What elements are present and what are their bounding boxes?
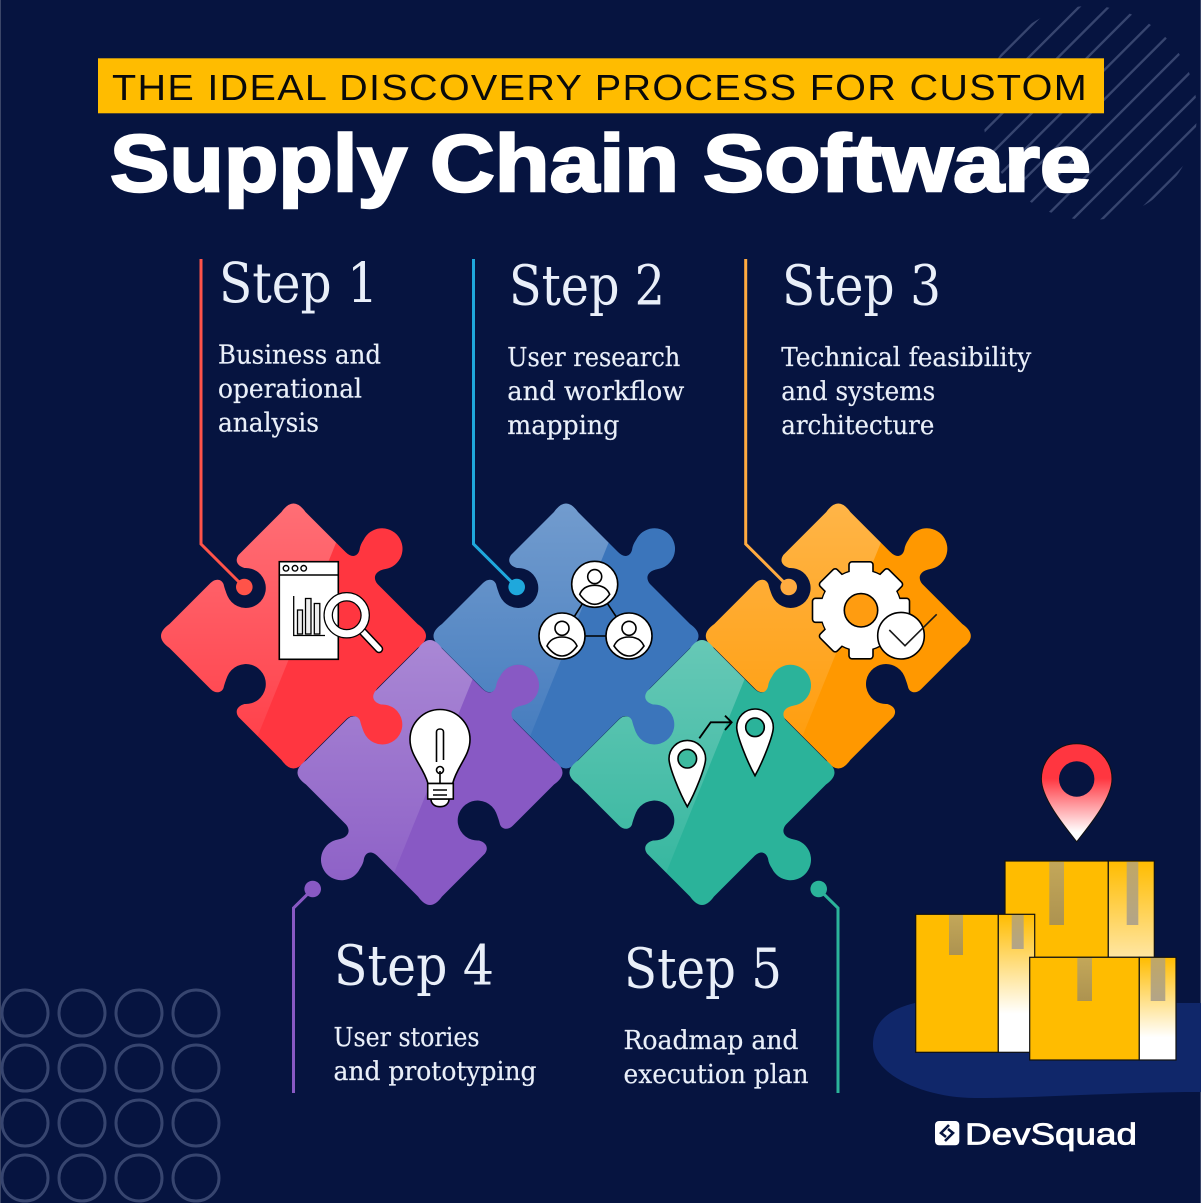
box: left (916, 914, 1035, 1052)
step 3 text: architecture (781, 411, 934, 441)
step 3 text: Technical feasibility (781, 343, 1032, 373)
step 1 connector (201, 259, 253, 595)
step 1 text: operational (218, 375, 362, 405)
location pin (1041, 744, 1112, 842)
step 5 text: Roadmap and (624, 1026, 798, 1056)
main heading: Chain (430, 119, 679, 209)
step 1 text: Business and (218, 340, 381, 370)
puzzle piece: orange (706, 504, 971, 768)
step 4 connector (294, 881, 321, 1093)
step 5 text: execution plan (624, 1060, 809, 1090)
step 2 text: mapping (507, 411, 619, 441)
title banner: THE IDEAL DISCOVERY PROCESS FOR CUSTOM (112, 67, 1088, 108)
box: back (1005, 861, 1154, 957)
step 2 text: User research (507, 343, 681, 373)
step 3 text: Step 3 (782, 254, 941, 318)
step 4 text: and prototyping (334, 1057, 536, 1087)
step 1 text: analysis (218, 409, 319, 439)
step 2 text: and workflow (507, 377, 684, 407)
step 1 text: Step 1 (219, 251, 378, 315)
step 2 text: Step 2 (509, 254, 665, 318)
step 2 text (507, 254, 684, 441)
step 3 text (781, 254, 1032, 441)
icon: analytics window with magnifier (279, 562, 379, 659)
step 2 connector (474, 259, 525, 595)
icon: map pins with arrow (669, 709, 773, 807)
step 3 text: and systems (781, 377, 935, 407)
icon: light bulb (410, 710, 470, 807)
decorative striped disc (984, 6, 1196, 220)
step 1 text (218, 251, 381, 439)
puzzle piece: red (161, 504, 426, 768)
icon: user network (539, 561, 652, 659)
box: front (1030, 957, 1176, 1060)
step 4 text (334, 934, 536, 1087)
main heading: Software (703, 119, 1091, 209)
puzzle piece: green (570, 640, 834, 905)
main heading (110, 119, 1091, 209)
step 3 connector (746, 259, 797, 595)
icon: gear with check (812, 562, 937, 659)
puzzle piece: blue (434, 504, 698, 768)
puzzle piece: purple (298, 640, 562, 905)
logo: DevSquad: DevSquad (965, 1117, 1137, 1151)
step 4 text: User stories (334, 1023, 480, 1053)
step 5 text: Step 5 (624, 936, 782, 1000)
main heading: Supply (110, 119, 407, 209)
background blob under boxes (873, 1003, 1201, 1098)
step 5 text (624, 936, 809, 1090)
title banner (98, 58, 1104, 113)
step 5 connector (810, 881, 838, 1093)
decorative circle grid (2, 990, 219, 1201)
step 4 text: Step 4 (334, 934, 494, 998)
